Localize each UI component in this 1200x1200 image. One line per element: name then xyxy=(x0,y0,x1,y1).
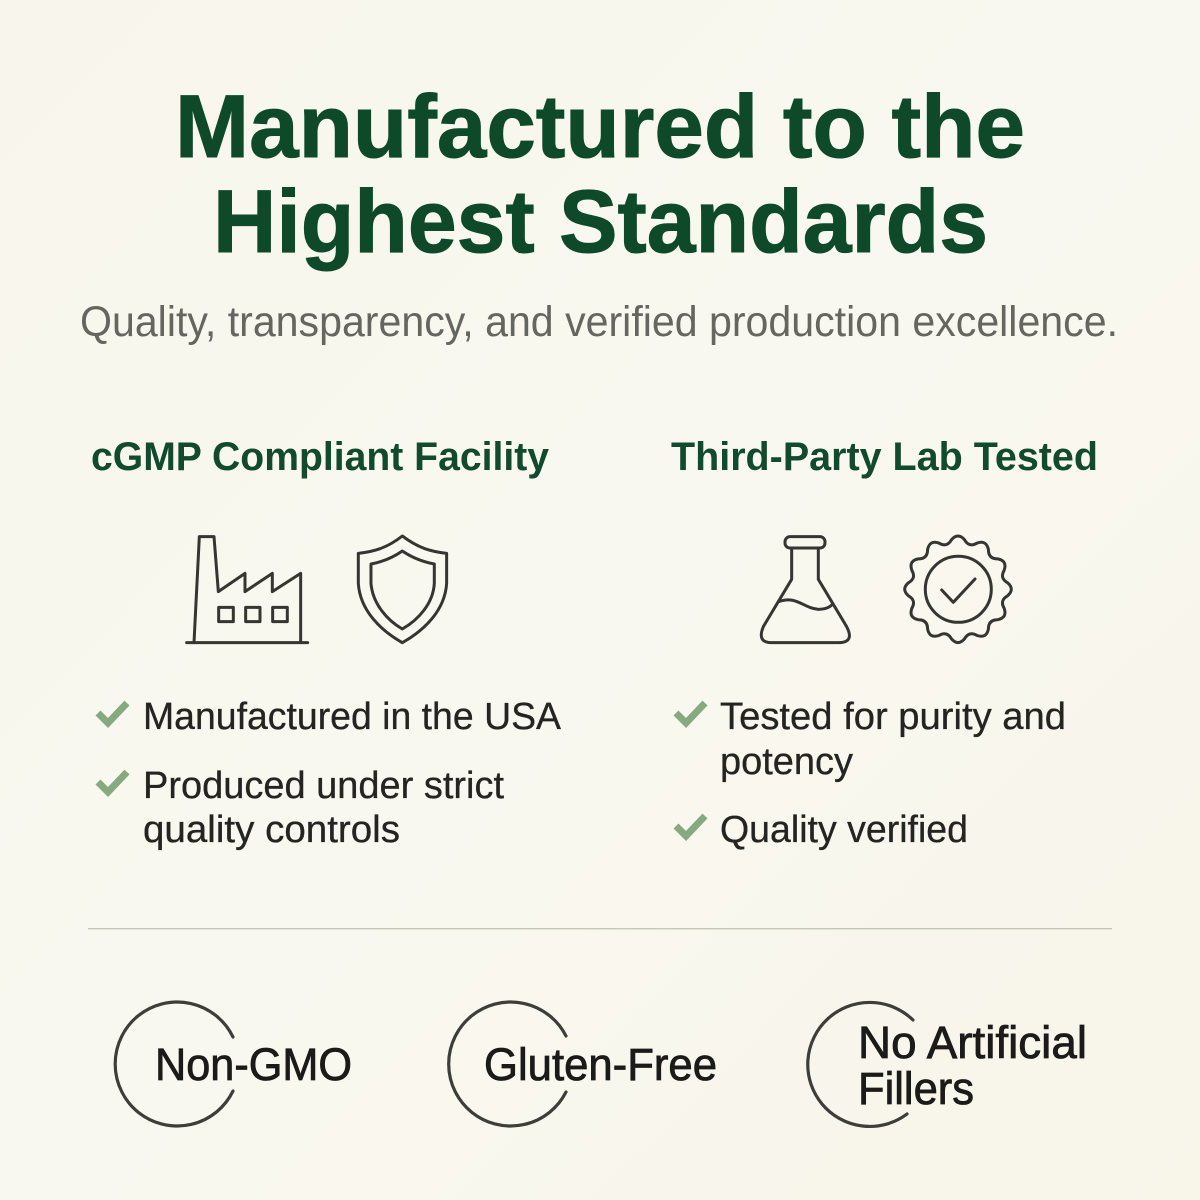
bullet: Manufactured in the USA: Manufactured in the USA xyxy=(143,696,562,738)
bullet: Produced under strict quality controls xyxy=(98,765,504,851)
icon: shield xyxy=(358,536,447,643)
bullet: Produced under strict quality controls: quality controls xyxy=(143,809,400,851)
title xyxy=(175,76,1025,271)
badge: No Artificial Fillers: Fillers xyxy=(858,1063,974,1114)
bullet: Tested for purity and potency xyxy=(676,696,1066,783)
badge: No Artificial Fillers xyxy=(808,1002,1087,1126)
panel: cGMP compliant facility xyxy=(91,435,562,851)
icon: factory xyxy=(187,537,308,643)
bullet: Quality verified: Quality verified xyxy=(720,809,968,851)
bullet: Tested for purity and potency: potency xyxy=(720,741,853,783)
heading: cGMP Compliant Facility: cGMP Compliant Facility xyxy=(91,435,550,479)
badge: Non-GMO xyxy=(115,1002,352,1126)
subtitle: Quality, transparency, and verified production excellence. xyxy=(80,298,1118,346)
panel: third-party lab tested xyxy=(671,435,1098,851)
icon: flask xyxy=(761,537,849,643)
title: Manufactured to the xyxy=(175,76,1025,176)
bullet: Produced under strict quality controls: Produced under strict xyxy=(143,765,504,807)
badge: Gluten-Free: Gluten-Free xyxy=(484,1039,717,1090)
badge: Non-GMO: Non-GMO xyxy=(155,1039,352,1090)
icon: quality seal xyxy=(905,536,1011,643)
title: Highest Standards xyxy=(213,171,988,271)
badge: Gluten-Free xyxy=(449,1002,717,1126)
bullet: Tested for purity and potency: Tested for purity and xyxy=(720,696,1066,738)
heading: Third-Party Lab Tested: Third-Party Lab Tested xyxy=(671,435,1098,479)
badge: No Artificial Fillers: No Artificial xyxy=(858,1017,1087,1068)
